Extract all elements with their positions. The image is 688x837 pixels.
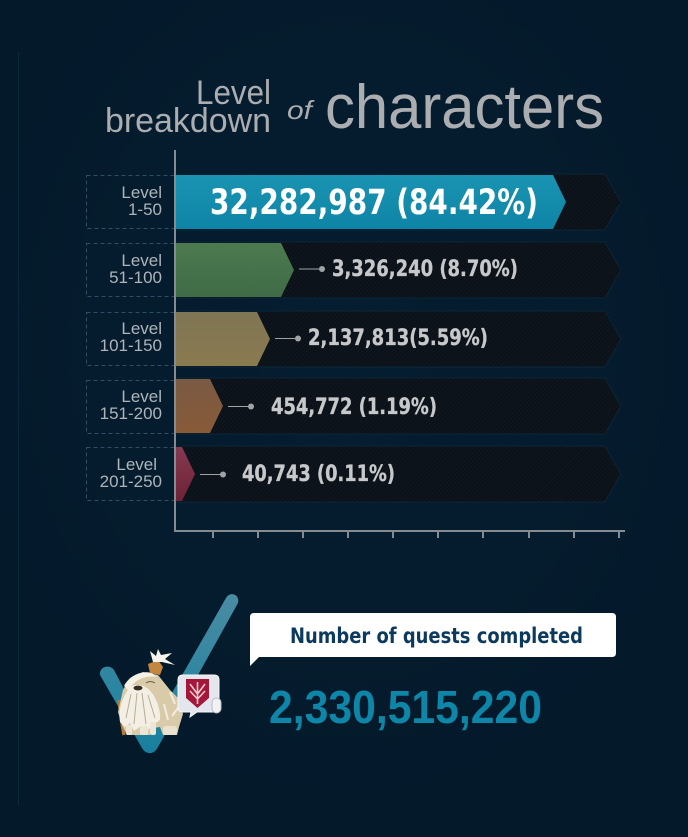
row: level 51-100 <box>86 242 621 298</box>
title <box>105 73 604 142</box>
title: Level <box>196 74 271 112</box>
row: level 101-150 <box>86 311 621 367</box>
icon: character <box>118 649 183 735</box>
row: level 151-200: Level <box>121 387 162 406</box>
row: level 51-100: Level <box>121 251 162 270</box>
icon: speech bubble with shield <box>178 675 221 717</box>
row: level 101-150: Level <box>121 319 162 338</box>
row: level 101-150: 101-150 <box>100 336 162 355</box>
callout: number of quests completed <box>250 613 616 666</box>
row: level 51-100: 3,326,240 (8.70%) <box>332 257 518 282</box>
callout: number of quests completed: Number of quests completed <box>290 624 583 648</box>
row: level 1-50: 1-50 <box>128 200 162 219</box>
big number: quests: 2,330,515,220 <box>269 681 542 733</box>
title: breakdown <box>105 102 271 140</box>
chart axes <box>174 150 625 538</box>
title: characters <box>325 73 604 142</box>
row: level 1-50: 32,282,987 (84.42%) <box>210 183 538 223</box>
icon: check mark <box>100 594 238 753</box>
row: level 201-250: Level <box>116 455 157 474</box>
row: level 101-150: 2,137,813(5.59%) <box>308 326 488 351</box>
row: level 201-250: 40,743 (0.11%) <box>242 462 395 487</box>
row: level 1-50 <box>86 174 621 230</box>
row: level 201-250 <box>86 446 621 502</box>
row: level 151-200: 151-200 <box>100 404 162 423</box>
row: level 51-100: 51-100 <box>109 268 162 287</box>
row: level 201-250: 201-250 <box>100 472 162 491</box>
row: level 151-200: 454,772 (1.19%) <box>271 395 437 420</box>
row: level 151-200 <box>86 378 621 434</box>
row: level 1-50: Level <box>121 183 162 202</box>
title: of <box>287 95 315 125</box>
